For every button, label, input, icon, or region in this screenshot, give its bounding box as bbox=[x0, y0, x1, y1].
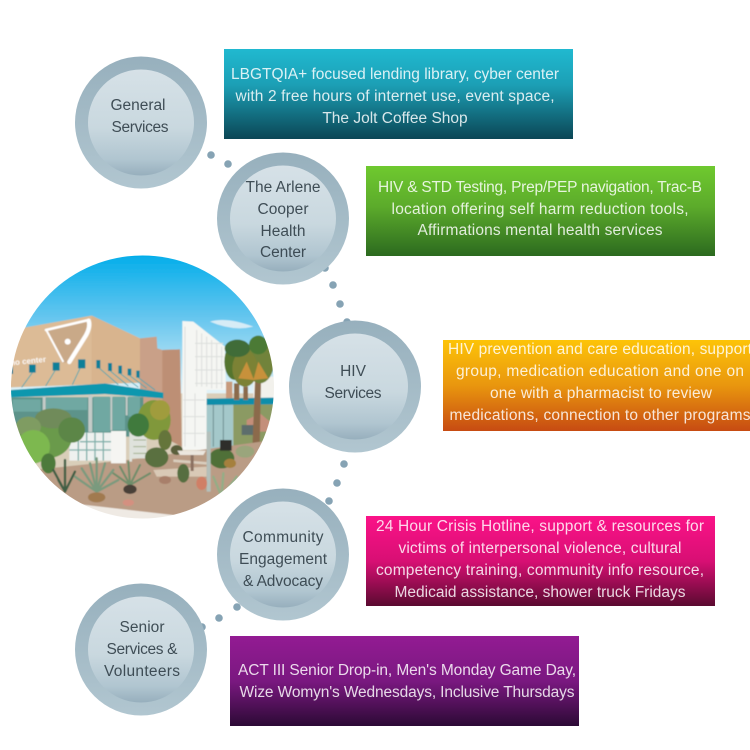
panel: Community Engagement description bbox=[366, 516, 715, 606]
connector dots: HIV Services to Community Engagement bbox=[325, 460, 348, 505]
desert agave plants bbox=[53, 458, 245, 497]
panel: Health Center description bbox=[366, 166, 715, 256]
node label: Community bbox=[242, 529, 324, 546]
node label: The Arlene bbox=[246, 179, 320, 196]
node label: Engagement bbox=[239, 551, 328, 568]
panel text: group, medication education and one on bbox=[456, 363, 744, 380]
white fence bbox=[69, 430, 147, 463]
panel text: medications, connection to other programs bbox=[450, 407, 750, 424]
panel text: ACT III Senior Drop-in, Men's Monday Game Day, bbox=[238, 662, 576, 679]
node label: Health bbox=[260, 223, 306, 240]
panel: Senior Services description bbox=[230, 636, 579, 726]
node: HIV Services bbox=[289, 320, 421, 452]
connector dots: Community Engagement to Senior Services bbox=[198, 603, 241, 631]
node label: Services bbox=[112, 119, 169, 136]
node label: Services & bbox=[106, 641, 178, 658]
trees and bushes bbox=[15, 400, 254, 483]
node: Community Engagement & Advocacy bbox=[217, 488, 349, 620]
panel text: one with a pharmacist to review bbox=[490, 385, 713, 402]
planters and rocks bbox=[88, 476, 207, 506]
picnic table bbox=[173, 432, 211, 492]
sign text on facade: ho center bbox=[10, 355, 46, 368]
logo on facade bbox=[46, 320, 90, 363]
panel: HIV Services description bbox=[443, 340, 750, 431]
panel text: HIV & STD Testing, Prep/PEP navigation, Trac-B bbox=[378, 179, 702, 196]
panel text: competency training, community info resource, bbox=[376, 562, 704, 579]
palm trees bbox=[224, 336, 274, 448]
panel text: The Jolt Coffee Shop bbox=[322, 110, 468, 127]
panel text: location offering self harm reduction tools, bbox=[392, 201, 688, 218]
node label: Services bbox=[324, 385, 382, 402]
panel text: Medicaid assistance, shower truck Fridays bbox=[394, 584, 686, 601]
node label: General bbox=[110, 97, 166, 114]
awning brackets bbox=[11, 359, 155, 390]
photo: community center building in a circle bbox=[11, 256, 274, 518]
ground and gravel bbox=[40, 441, 262, 515]
node label: Volunteers bbox=[104, 663, 180, 680]
panel text: LBGTQIA+ focused lending library, cyber center bbox=[231, 66, 559, 83]
connector dots: Health Center to HIV Services bbox=[321, 264, 351, 326]
node: The Arlene Cooper Health Center bbox=[217, 152, 349, 284]
panel text: with 2 free hours of internet use, event space, bbox=[234, 88, 554, 105]
panel: General Services description bbox=[224, 49, 573, 139]
connector dots: General Services to Health Center bbox=[207, 151, 232, 168]
node: General Services bbox=[75, 56, 207, 188]
panel text: victims of interpersonal violence, cultural bbox=[398, 540, 682, 557]
node: Senior Services & Volunteers bbox=[75, 584, 207, 716]
node label: HIV bbox=[340, 363, 367, 380]
node label: Center bbox=[260, 244, 306, 261]
panel text: Wize Womyn's Wednesdays, Inclusive Thursdays bbox=[240, 684, 575, 701]
panel text: HIV prevention and care education, support bbox=[448, 341, 750, 358]
node label: Senior bbox=[120, 619, 164, 636]
node label: & Advocacy bbox=[243, 573, 323, 590]
panel text: Affirmations mental health services bbox=[418, 222, 663, 239]
panel text: 24 Hour Crisis Hotline, support & resources for bbox=[376, 518, 704, 535]
node label: Cooper bbox=[258, 201, 308, 218]
